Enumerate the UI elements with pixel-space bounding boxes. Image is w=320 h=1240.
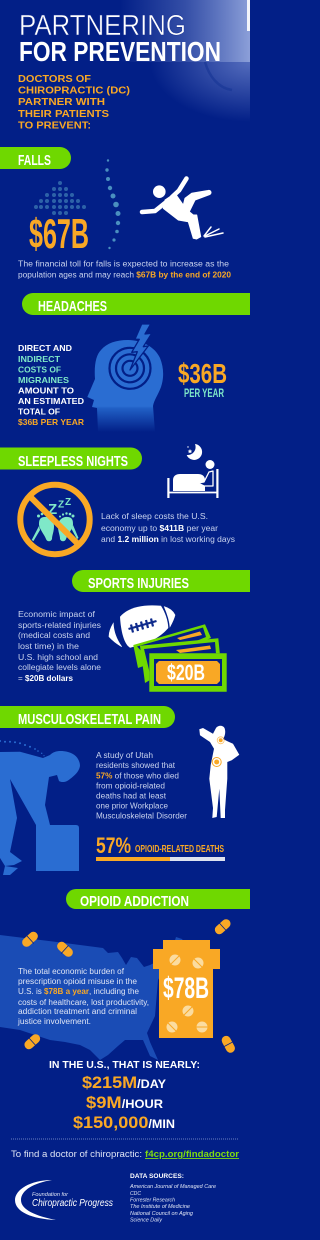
heading: falls: FALLS: [18, 152, 51, 169]
panel: sports injuries: [18, 570, 250, 692]
stats: cost over time: $9M /HOUR: [86, 1094, 164, 1112]
heading: musculoskeletal pain: MUSCULOSKELETAL PAIN: [18, 711, 161, 728]
icon: moon and stars: [187, 444, 202, 460]
panel: musculoskeletal pain: [0, 706, 239, 875]
stats: cost over time: $215M /DAY: [82, 1074, 166, 1092]
text: sports: lost time) in the: [18, 642, 80, 651]
text: opioid burden: addiction treatment and criminal: [18, 1007, 137, 1016]
text: sleep: Lack of sleep costs the U.S.: [101, 512, 208, 521]
heading: sports injuries: [72, 570, 250, 592]
text: falls: The financial toll for falls is expected to increase as the: [18, 260, 230, 268]
arrow of dots: [34, 181, 86, 215]
heading: headaches: HEADACHES: [38, 298, 107, 315]
icon: pill bottle: [153, 940, 220, 1038]
text: opioid burden: justice involvement.: [17, 1017, 91, 1026]
icon: feet: [32, 512, 78, 541]
icon: football: [109, 605, 175, 648]
text: sports: (medical costs and: [18, 631, 90, 640]
icon: money stack: [133, 624, 227, 692]
logo: foundation for chiropractic progress: [15, 1180, 113, 1220]
subtitle: [18, 73, 130, 132]
text: utah study: A study of Utah: [96, 751, 153, 760]
stat: $36B per year: $36B: [178, 358, 227, 389]
text: sleep: economy up to $411B per year: [101, 524, 218, 533]
text: migraines: TOTAL OF: [18, 406, 60, 416]
subtitle: THEIR PATIENTS: [18, 108, 109, 120]
stat: $78B: $78B: [163, 972, 209, 1005]
stat: $36B per year: [178, 358, 227, 400]
logo: foundation for chiropractic progress: Foundation for: [32, 1192, 69, 1198]
data sources: The Institute of Medicine: [130, 1204, 190, 1210]
falling path dots: [105, 159, 120, 249]
data sources: DATA SOURCES:: [130, 1173, 184, 1180]
data sources: Science Daily: [130, 1218, 162, 1224]
icon: bending person: [0, 751, 80, 875]
icon: standing figure: [199, 726, 239, 818]
icon: person in bed: [167, 460, 218, 498]
text: migraines: DIRECT AND: [18, 343, 72, 353]
text: zzz: Z: [65, 497, 71, 508]
stat: $36B per year: PER YEAR: [184, 386, 224, 400]
subtitle: PARTNER WITH: [18, 96, 105, 108]
progress bar: [96, 857, 225, 861]
call to action: [11, 1149, 240, 1159]
panel: falls: [0, 147, 232, 280]
text: migraines: MIGRAINES: [18, 375, 69, 385]
stat: $20B: $20B: [167, 660, 205, 685]
data sources: National Council on Aging: [130, 1211, 193, 1217]
back pain dots: [0, 740, 45, 756]
text: migraines: AMOUNT TO: [18, 386, 74, 396]
text: utah study: deaths had at least: [96, 792, 167, 800]
text: migraines: INDIRECT: [18, 354, 61, 364]
text: opioid burden: U.S. is $78B a year, including the: [18, 987, 140, 996]
heading: musculoskeletal pain: [0, 706, 175, 728]
text: opioid burden: [17, 967, 149, 1026]
logo: foundation for chiropractic progress: Chiropractic Progress: [32, 1198, 113, 1209]
icon: pills: [20, 916, 237, 1055]
map: united states: [0, 935, 186, 1060]
data sources: CDC: [130, 1191, 141, 1197]
data sources: [129, 1173, 216, 1224]
text: sleep: and 1.2 million in lost working days: [101, 535, 235, 544]
stats: cost over time: $150,000 /MIN: [73, 1114, 175, 1132]
stat: 57% opioid-related deaths: 57%: [96, 833, 131, 858]
text: migraines: [18, 343, 84, 427]
text: utah study: one prior Workplace: [96, 802, 169, 810]
text: opioid burden: costs of healthcare, lost productivity,: [18, 998, 149, 1007]
subtitle: TO PREVENT:: [18, 120, 91, 132]
heading: opioid addiction: OPIOID ADDICTION: [80, 893, 189, 910]
text: migraines: AN ESTIMATED: [18, 396, 84, 406]
text: opioid burden: prescription opioid misuse in the: [18, 977, 138, 986]
text: falls: [18, 260, 232, 280]
stats: cost over time: [49, 1060, 200, 1132]
text: opioid burden: The total economic burden of: [18, 967, 125, 976]
text: utah study: [96, 751, 187, 820]
background: [0, 0, 250, 1240]
text: sports: collegiate levels alone: [18, 663, 102, 672]
heading: opioid addiction: [66, 889, 250, 910]
stats: cost over time: IN THE U.S., THAT IS NEARLY:: [49, 1060, 200, 1071]
text: migraines: $36B PER YEAR: [18, 417, 84, 427]
text: sports: [18, 610, 102, 683]
title: PARTNERING: [19, 10, 186, 42]
heading: headaches: [22, 293, 250, 315]
text: sports: Economic impact of: [18, 610, 96, 619]
header photo: [120, 0, 250, 122]
icon: head with target: [87, 324, 163, 432]
panel: opioid addiction: [0, 889, 250, 1132]
icon: no sleep sign: [20, 485, 90, 554]
data sources: American Journal of Managed Care: [129, 1184, 216, 1190]
stat: 57% opioid-related deaths: [96, 833, 224, 858]
text: falls: population ages and may reach $67B by the end of 2020: [18, 270, 232, 280]
call to action: To find a doctor of chiropractic:: [11, 1149, 142, 1159]
text: migraines: COSTS OF: [18, 364, 61, 374]
call to action: f4cp.org/findadoctor: [145, 1149, 240, 1159]
text: zzz: Z: [58, 500, 64, 510]
text: zzz: [48, 497, 71, 518]
icon: falling person: [142, 178, 223, 239]
data sources: Forrester Research: [130, 1198, 175, 1204]
text: utah study: 57% of those who died: [96, 772, 179, 780]
text: utah study: residents showed that: [96, 761, 176, 770]
heading: sleepless nights: [0, 448, 142, 470]
text: sleep: [101, 512, 235, 544]
text: utah study: Musculoskeletal Disorder: [96, 812, 187, 820]
heading: sports injuries: SPORTS INJURIES: [88, 575, 189, 592]
panel: headaches: [18, 293, 250, 432]
text: utah study: from opioid-related: [96, 782, 165, 790]
text: zzz: Z: [48, 501, 57, 518]
panel: sleepless nights: [0, 444, 235, 554]
text: sports: U.S. high school and: [18, 653, 98, 662]
heading: falls: [0, 147, 71, 169]
text: sports: sports-related injuries: [18, 621, 101, 630]
stat: $67B: $67B: [29, 210, 89, 257]
text: sports: = $20B dollars: [18, 674, 74, 683]
subtitle: CHIROPRACTIC (DC): [18, 84, 130, 96]
subtitle: DOCTORS OF: [18, 73, 92, 85]
heading: sleepless nights: SLEEPLESS NIGHTS: [18, 453, 128, 470]
title: [19, 10, 221, 67]
